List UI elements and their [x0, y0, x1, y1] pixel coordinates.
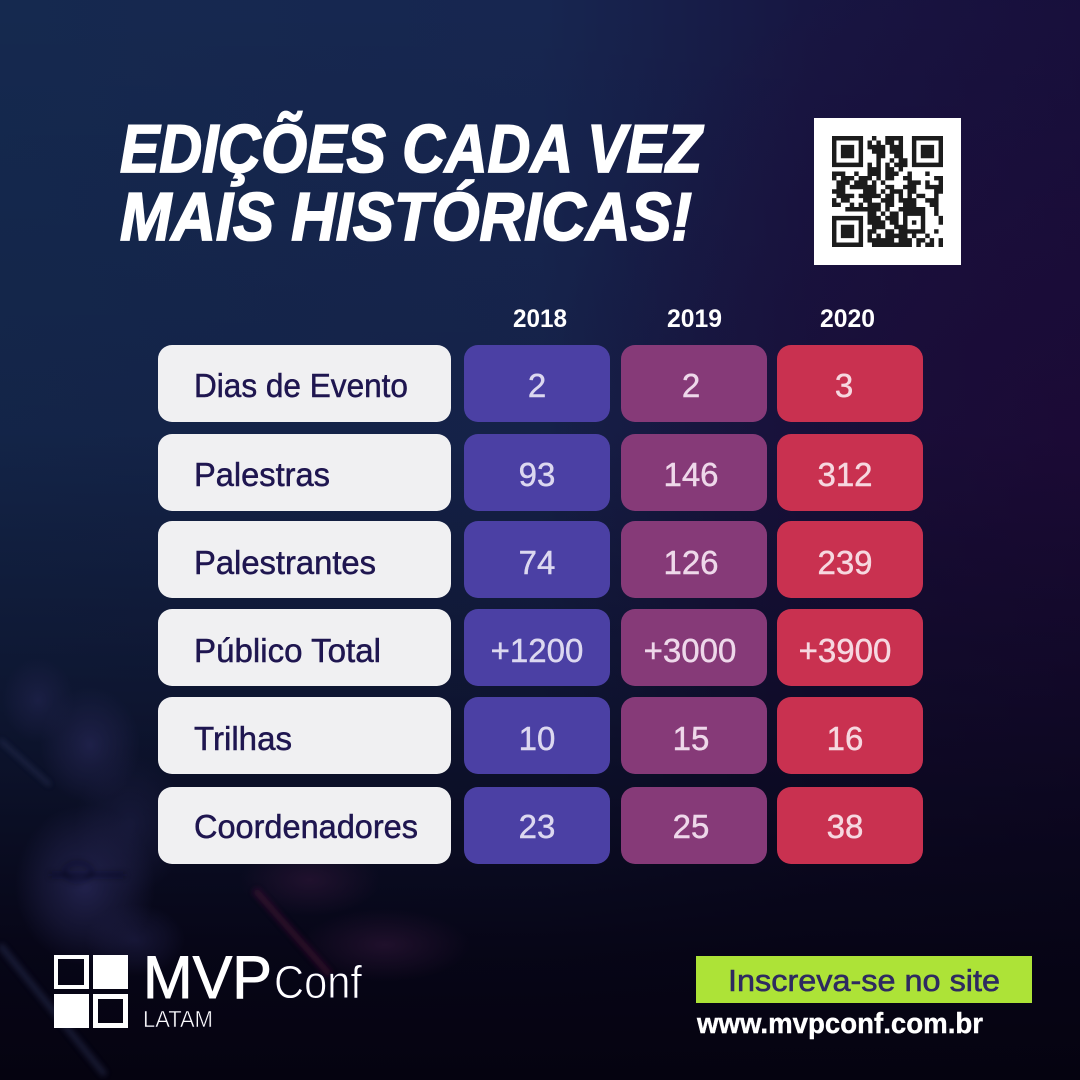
table: year headers: 2019	[667, 305, 722, 333]
table row: Palestrantes: 126	[663, 544, 719, 581]
table row: Trilhas	[158, 697, 923, 774]
logo: MVPConf LATAM: MVP	[143, 944, 272, 1011]
table: year headers	[513, 305, 875, 333]
table row: Palestrantes	[158, 521, 923, 598]
table row: Palestrantes: Palestrantes	[194, 544, 376, 581]
table row: Público Total: +1200	[491, 632, 583, 669]
table row: Trilhas: Trilhas	[194, 720, 292, 757]
call to action: signup banner	[696, 956, 1032, 1003]
table row: Coordenadores: 23	[519, 808, 555, 845]
logo: MVPConf LATAM: Conf	[274, 956, 362, 1008]
table row: Dias de Evento	[158, 345, 923, 422]
table row: Público Total: Público Total	[194, 632, 381, 669]
logo: MVPConf LATAM	[54, 944, 362, 1032]
table row: Trilhas: 10	[519, 720, 555, 757]
table row: Trilhas: 15	[673, 720, 709, 757]
table row: Coordenadores: Coordenadores	[194, 808, 418, 845]
title: EDIÇÕES CADA VEZ	[120, 110, 704, 187]
table row: Dias de Evento: Dias de Evento	[194, 367, 408, 404]
table row: Palestrantes: 239	[817, 544, 873, 581]
call to action: signup banner: Inscreva-se no site	[728, 963, 1000, 998]
table row: Palestrantes: 74	[519, 544, 555, 581]
table row: Dias de Evento: 2	[682, 367, 700, 404]
table row: Coordenadores	[158, 787, 923, 864]
table row: Dias de Evento: 3	[835, 367, 853, 404]
table row: Público Total: +3900	[799, 632, 891, 669]
table row: Coordenadores: 25	[673, 808, 709, 845]
table row: Público Total	[158, 609, 923, 686]
title	[120, 110, 704, 255]
table row: Dias de Evento: 2	[528, 367, 546, 404]
table row: Palestras: 312	[817, 456, 873, 493]
website url: www.mvpconf.com.br	[696, 1008, 983, 1040]
table row: Palestras: 146	[663, 456, 719, 493]
table: year headers: 2020	[820, 305, 875, 333]
table row: Público Total: +3000	[644, 632, 736, 669]
table row: Coordenadores: 38	[827, 808, 863, 845]
logo: MVPConf LATAM: LATAM	[143, 1006, 213, 1032]
background photo: audience silhouettes	[0, 658, 470, 1075]
table row: Palestras	[158, 434, 923, 511]
title: MAIS HISTÓRICAS!	[120, 179, 692, 255]
table row: Palestras: Palestras	[194, 456, 330, 493]
table: year headers: 2018	[513, 305, 567, 333]
table row: Trilhas: 16	[827, 720, 863, 757]
QR code	[814, 118, 961, 265]
table row: Palestras: 93	[519, 456, 555, 493]
